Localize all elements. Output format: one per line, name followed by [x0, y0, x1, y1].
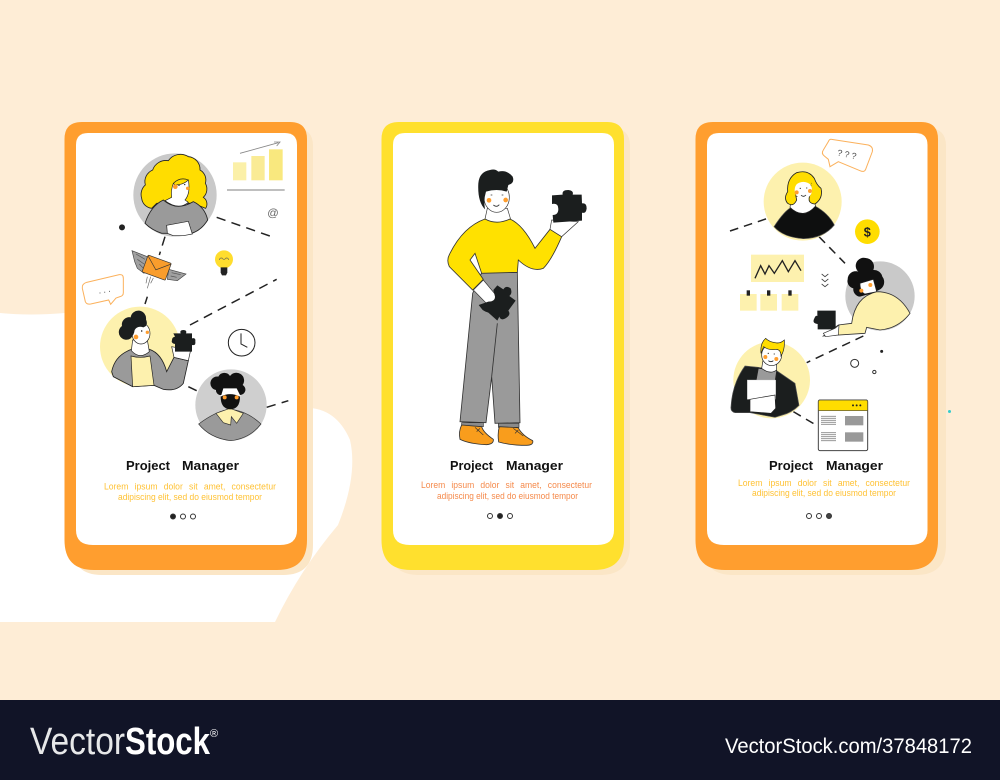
- heading: Project: [126, 458, 171, 473]
- head: [484, 182, 509, 212]
- heading: Project: [769, 458, 814, 473]
- pagination dots: [806, 514, 832, 518]
- heading: [126, 458, 239, 473]
- cheeks: [487, 198, 508, 203]
- panel: phone screen 2: [382, 122, 630, 575]
- speech bubble: [82, 275, 123, 304]
- icon: chevrons: [822, 274, 828, 287]
- trouser cuffs: [462, 423, 519, 427]
- trousers: [460, 272, 520, 423]
- heading: Project: [450, 458, 494, 473]
- body text: adipiscing elit, sed do eiusmod tempor: [752, 488, 896, 498]
- body text: adipiscing elit, sed do eiusmod tempor: [118, 492, 262, 502]
- sweater: [448, 219, 562, 290]
- decorative circles: [851, 350, 883, 374]
- body text: Lorem ipsum dolor sit amet, consectetur: [738, 478, 910, 488]
- icon: at sign: @: [267, 207, 279, 219]
- avatar: blonde woman: [764, 163, 842, 241]
- icon: dollar coin: $: [864, 225, 871, 239]
- right hand: [550, 220, 578, 237]
- pagination dots: [170, 514, 196, 519]
- speech bubble: . . .: [97, 284, 111, 296]
- VectorStock logo: Stock: [125, 721, 211, 763]
- heading: [769, 458, 883, 473]
- puzzle piece: raised: [552, 190, 587, 223]
- neck: [485, 208, 511, 223]
- left hand: [473, 280, 500, 305]
- body text: Lorem ipsum dolor sit amet, consectetur: [421, 480, 592, 490]
- body text: Lorem ipsum dolor sit amet, consectetur: [104, 482, 276, 492]
- shoes: [459, 425, 533, 445]
- puzzle piece: lowered: [479, 285, 516, 321]
- icon: light bulb: [215, 250, 233, 275]
- smile: [491, 195, 503, 206]
- body text: [421, 480, 592, 501]
- trouser detail: [492, 323, 497, 377]
- browser window: [818, 400, 868, 451]
- icon: clock: [228, 329, 255, 356]
- image id: VectorStock.com/37848172: [725, 735, 972, 758]
- footer bar: [0, 700, 1000, 780]
- VectorStock logo: ®: [210, 728, 218, 740]
- illustration: team network: [82, 142, 288, 441]
- icon: bar chart: [227, 142, 285, 190]
- line chart card: [751, 255, 804, 282]
- pagination dots: [488, 514, 512, 518]
- VectorStock logo: Vector: [30, 721, 125, 763]
- stray teal dot: [948, 410, 951, 413]
- dashed connectors: [145, 217, 288, 407]
- heading: Manager: [506, 458, 563, 473]
- icon: dollar coin: [855, 219, 880, 244]
- heading: Manager: [182, 458, 239, 473]
- avatar: curly-haired woman: [133, 153, 217, 237]
- heading: [450, 458, 563, 473]
- heading: Manager: [826, 458, 883, 473]
- dashed connectors: [730, 218, 863, 426]
- illustration: team collaboration: [730, 139, 915, 451]
- icon: dot: [119, 224, 125, 230]
- avatar: bearded man: [195, 369, 267, 441]
- panel: phone screen 1: [64, 122, 313, 575]
- panel: phone screen 3: [696, 122, 946, 575]
- speech bubble: [822, 139, 872, 171]
- VectorStock logo: [30, 721, 218, 763]
- avatar: man with puzzle piece: [100, 307, 195, 390]
- hair: [478, 169, 513, 209]
- avatar: curly-haired woman with puzzle: [814, 258, 915, 337]
- icon: winged envelope: [132, 251, 186, 288]
- body text: [738, 478, 910, 498]
- avatar: blond man with document: [731, 338, 810, 418]
- sticky notes: [740, 290, 798, 311]
- illustration: man holding puzzle pieces: [448, 169, 587, 445]
- speech bubble: ? ? ?: [836, 147, 858, 161]
- body text: adipiscing elit, sed do eiusmod tempor: [437, 491, 578, 501]
- body text: [104, 482, 276, 502]
